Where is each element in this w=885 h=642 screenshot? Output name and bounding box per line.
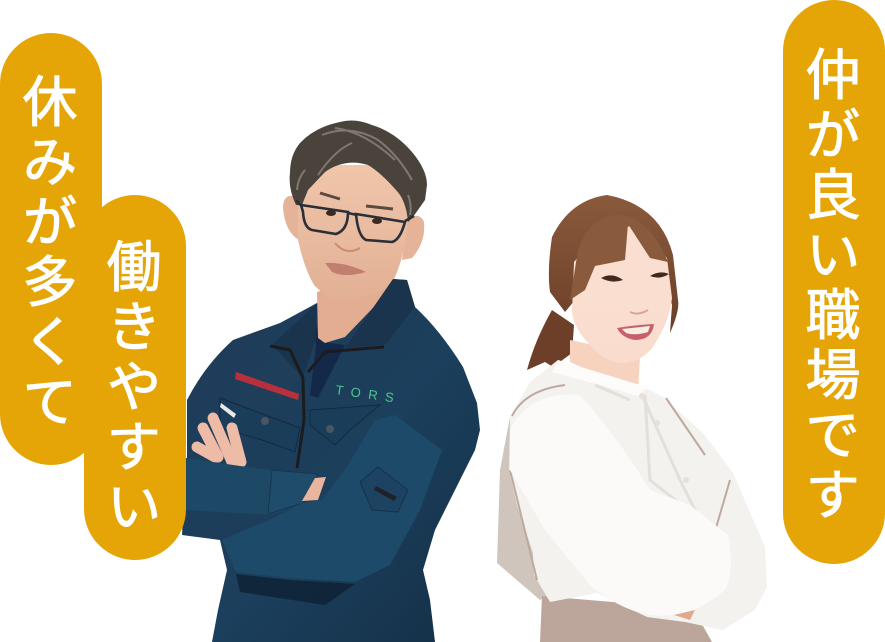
vest strap [510,385,730,580]
pill: 休みが多くて: 休みが多くて [14,73,76,433]
logo: T O R S [335,382,397,405]
neck [317,270,393,343]
hand 2 [302,477,326,501]
apron skirt [540,596,712,642]
sleeve [510,394,731,616]
eyes [326,210,336,216]
hand [674,610,695,620]
zipper [270,346,384,468]
face [572,225,672,363]
collar [272,279,415,378]
inner shirt [310,320,345,398]
vest back [497,417,560,600]
hair [290,121,427,222]
pill: 仲が良い職場です: 仲が良い職場です [797,46,859,526]
pill: 休みが多くて [0,33,102,465]
pill: 働きやすい: 働きやすい [98,238,160,538]
red chest zip [235,372,299,400]
folded arm [185,458,318,515]
neck [570,340,640,393]
blouse folds [595,385,700,520]
arm shadow [236,574,355,605]
right ear [402,216,424,260]
sleeve pocket [360,467,408,512]
pill: 仲が良い職場です [783,0,885,564]
left ear [283,196,305,240]
forearm [222,415,442,582]
eyes [601,272,669,282]
face [298,165,410,300]
badge [374,486,397,501]
man [182,121,480,642]
nose and mouth [335,243,360,251]
jacket body [182,279,480,642]
hair back [549,195,678,333]
woman [497,195,767,642]
right pocket [310,405,380,445]
pill: 働きやすい [84,195,186,560]
nose and mouth [630,310,648,314]
buttons [639,393,645,399]
left pocket [220,398,300,452]
hand [197,418,241,462]
glasses [296,200,414,242]
blouse [509,360,767,630]
collar [552,360,650,396]
ponytail [527,310,574,370]
tag [220,403,236,418]
bangs [570,215,668,300]
